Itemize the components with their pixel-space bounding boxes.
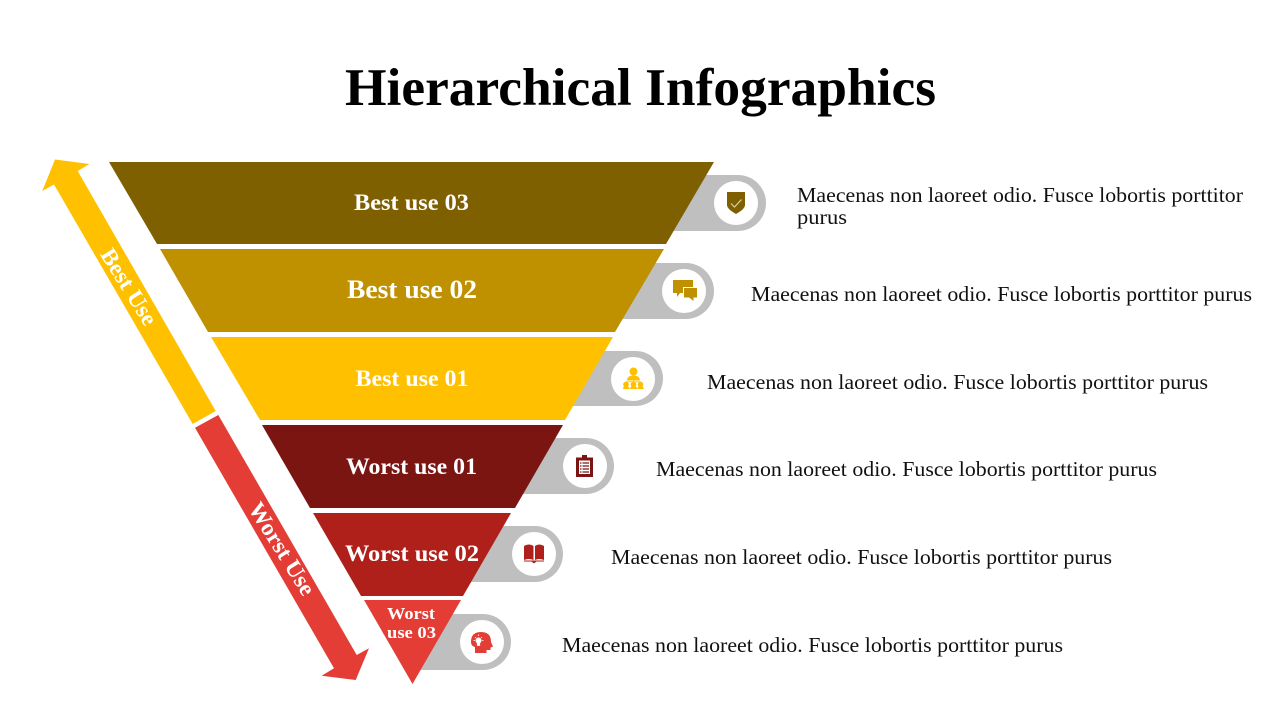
description 4: Maecenas non laoreet odio. Fusce lobortis porttitor purus [656,457,1157,481]
segment label 5: Worst use 02 [345,541,479,566]
segment label 6 [387,604,436,642]
icon circle: book [512,532,556,576]
row: worst use 02 [313,513,563,596]
description 2: Maecenas non laoreet odio. Fusce lobortis porttitor purus [751,282,1252,306]
connector pill 1 [640,175,766,231]
icon circle: hierarchy [611,357,655,401]
segment label 1: Best use 03 [354,190,469,215]
row: worst use 01 [262,425,614,508]
funnel segment 3 [211,337,613,420]
arrow: best use [42,160,216,424]
funnel segment 1 [109,162,714,244]
funnel segment 6 [364,600,461,684]
icon circle: chat [662,269,706,313]
row: worst use 03 [364,600,511,684]
row: best use 03 [109,162,766,244]
arrow: worst use [195,415,369,680]
description 5: Maecenas non laoreet odio. Fusce lobortis porttitor purus [611,545,1112,569]
title: Hierarchical Infographics [345,59,936,117]
segment label 3: Best use 01 [356,366,468,391]
connector pill 2 [590,263,714,319]
description 1 [797,183,1243,229]
icon circle: head with bulb [460,620,504,664]
connector pill 6 [418,614,511,670]
description 6: Maecenas non laoreet odio. Fusce lobortis porttitor purus [562,633,1063,657]
segment label 6: Worst [387,604,436,623]
description 1: purus [797,205,847,229]
connector pill 5 [440,526,563,582]
funnel segment 4 [262,425,563,508]
arrow: worst use: Worst Use [243,498,320,600]
arrow: best use: Best Use [95,244,162,330]
segment label 2: Best use 02 [347,275,477,304]
icon circle: clipboard [563,444,607,488]
connector pill 3 [540,351,663,406]
icon circle: shield [714,181,758,225]
connector pill 4 [490,438,614,494]
funnel segment 2 [160,249,664,332]
segment label 4: Worst use 01 [346,454,477,479]
row: best use 02 [160,249,714,332]
description 1: Maecenas non laoreet odio. Fusce lobortis porttitor [797,183,1243,207]
funnel segment 5 [313,513,511,596]
segment label 6: use 03 [387,623,436,642]
description 3: Maecenas non laoreet odio. Fusce lobortis porttitor purus [707,370,1208,394]
row: best use 01 [211,337,663,420]
